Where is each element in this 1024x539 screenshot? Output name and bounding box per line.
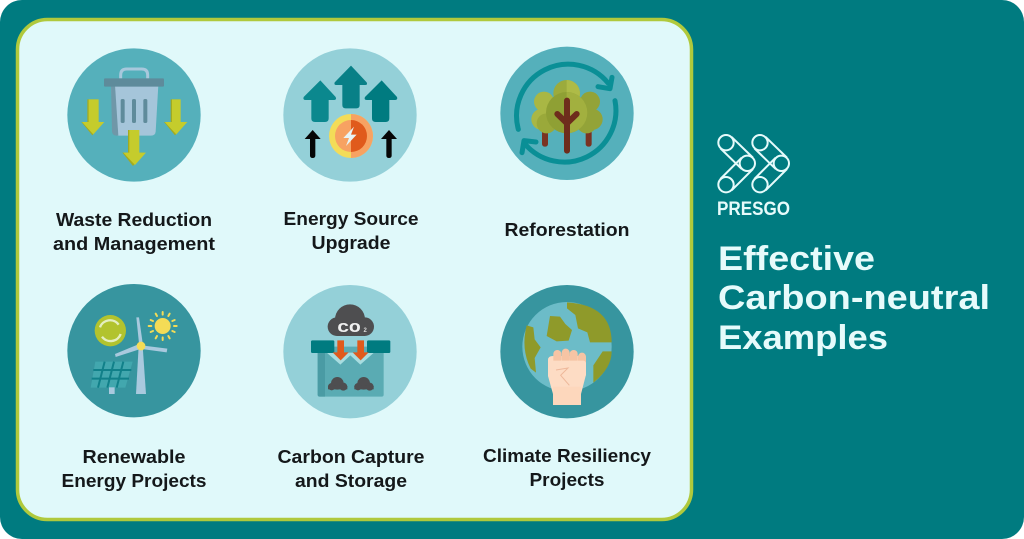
label: renewable: Renewable [82,446,186,467]
label: reforestation: Reforestation [504,219,630,240]
title: Effective [718,240,875,278]
label: and management: and Management [53,233,215,254]
icon: carbon capture and storage [283,285,417,418]
icon: energy source upgrade [283,48,417,182]
title: Examples [718,319,888,357]
label: energy source: Energy Source [284,208,418,229]
icon: waste reduction [67,48,201,182]
icon: reforestation [500,47,634,180]
title: Carbon-neutral [718,279,990,317]
label: projects: Projects [530,469,604,490]
title [718,240,990,357]
label: climate resiliency: Climate Resiliency [483,445,652,466]
label: and storage: and Storage [295,470,407,491]
label: waste reduction: Waste Reduction [56,209,212,230]
panel: examples grid [18,20,692,520]
logo: PRESGO [717,135,790,220]
label: energy projects: Energy Projects [62,470,206,491]
icon: climate resiliency [500,285,634,418]
icon: renewable energy projects [67,284,201,417]
icon: carbon capture and storage: 2 [363,327,367,334]
logo: PRESGO: PRESGO [717,198,790,220]
icon: carbon capture and storage: CO [337,321,361,337]
label: upgrade: Upgrade [312,232,390,253]
label: carbon capture: Carbon Capture [278,446,424,467]
